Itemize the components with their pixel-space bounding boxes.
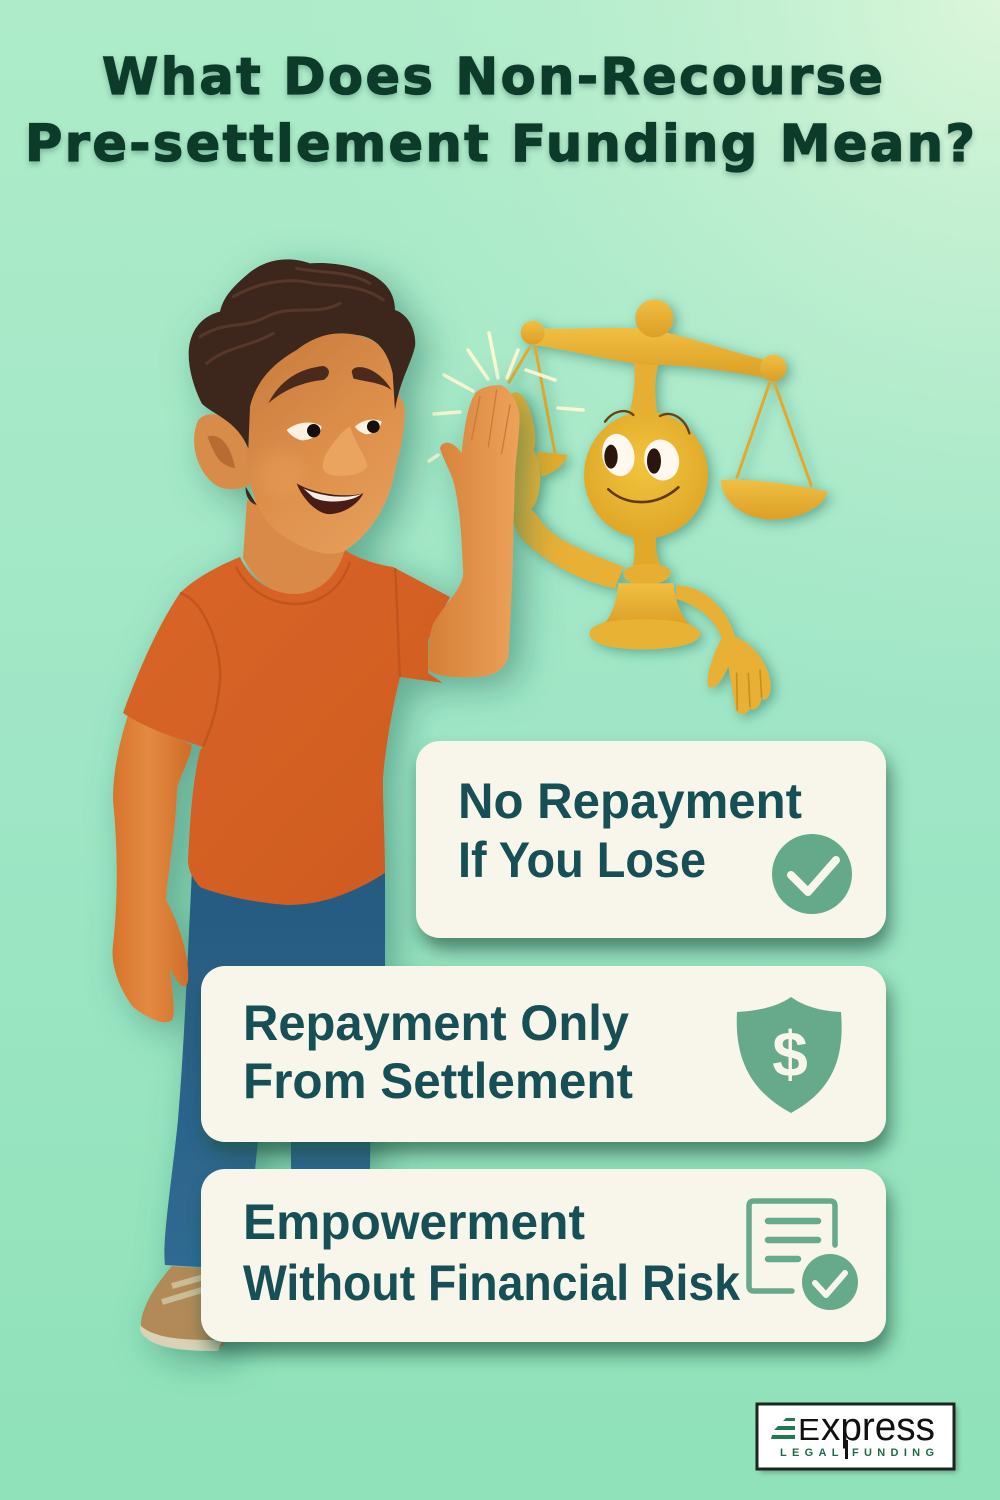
logo: express legal funding <box>757 1404 957 1472</box>
card heading: Repayment Only <box>243 995 629 1051</box>
shirt collar and seams <box>180 562 400 747</box>
logo wordmark <box>798 1405 935 1459</box>
icon: raised arm and hand <box>512 392 623 588</box>
icon: left scale pan <box>537 452 567 477</box>
card heading: Empowerment <box>243 1194 585 1250</box>
card heading: No Repayment <box>458 773 802 829</box>
logo mark <box>771 1418 795 1439</box>
shoe <box>141 1266 225 1351</box>
title: Pre-settlement Funding Mean? <box>25 115 975 174</box>
icon: dollar shield <box>737 997 842 1113</box>
icon: document with check <box>749 1201 858 1310</box>
icon: check circle <box>772 834 852 914</box>
title: What Does Non-Recourse <box>102 48 883 107</box>
logo wordmark: xpress <box>821 1405 935 1449</box>
card heading <box>458 773 802 888</box>
logo: express legal funding: LEGAL FUNDING <box>780 1447 934 1459</box>
icon: dollar shield: $ <box>772 1018 808 1090</box>
icon: scale strings <box>508 347 812 487</box>
card heading: If You Lose <box>458 832 706 888</box>
sparkles around the high five <box>429 333 583 461</box>
card: repayment only from settlement <box>201 966 886 1142</box>
card heading: From Settlement <box>243 1053 633 1109</box>
card: no repayment if you lose <box>416 741 886 938</box>
raised forearm and hand <box>428 385 519 677</box>
illustration: smiling scales of justice <box>508 299 827 714</box>
icon: lowered arm and hand <box>675 585 771 714</box>
eyes <box>287 420 382 440</box>
cheek highlight <box>257 450 303 497</box>
title <box>25 48 975 174</box>
eyebrows <box>268 366 392 403</box>
icon: pillar and beam <box>521 299 787 418</box>
icon: face <box>584 411 708 538</box>
lowered arm and hand <box>112 715 192 1022</box>
face <box>247 333 405 554</box>
hair <box>189 259 415 505</box>
card: empowerment without financial risk <box>201 1169 886 1342</box>
icon: base <box>589 537 700 649</box>
shirt <box>123 550 450 905</box>
icon: right scale pan <box>721 480 827 520</box>
card heading: Without Financial Risk <box>243 1255 740 1311</box>
ear <box>194 414 250 489</box>
logo wordmark: E <box>798 1412 820 1447</box>
jeans <box>164 870 385 1268</box>
nose <box>323 427 367 476</box>
mouth <box>297 483 363 514</box>
illustration: man giving a high five <box>112 259 519 1351</box>
card heading <box>243 1194 740 1311</box>
card heading <box>243 995 633 1109</box>
neck <box>243 500 345 598</box>
